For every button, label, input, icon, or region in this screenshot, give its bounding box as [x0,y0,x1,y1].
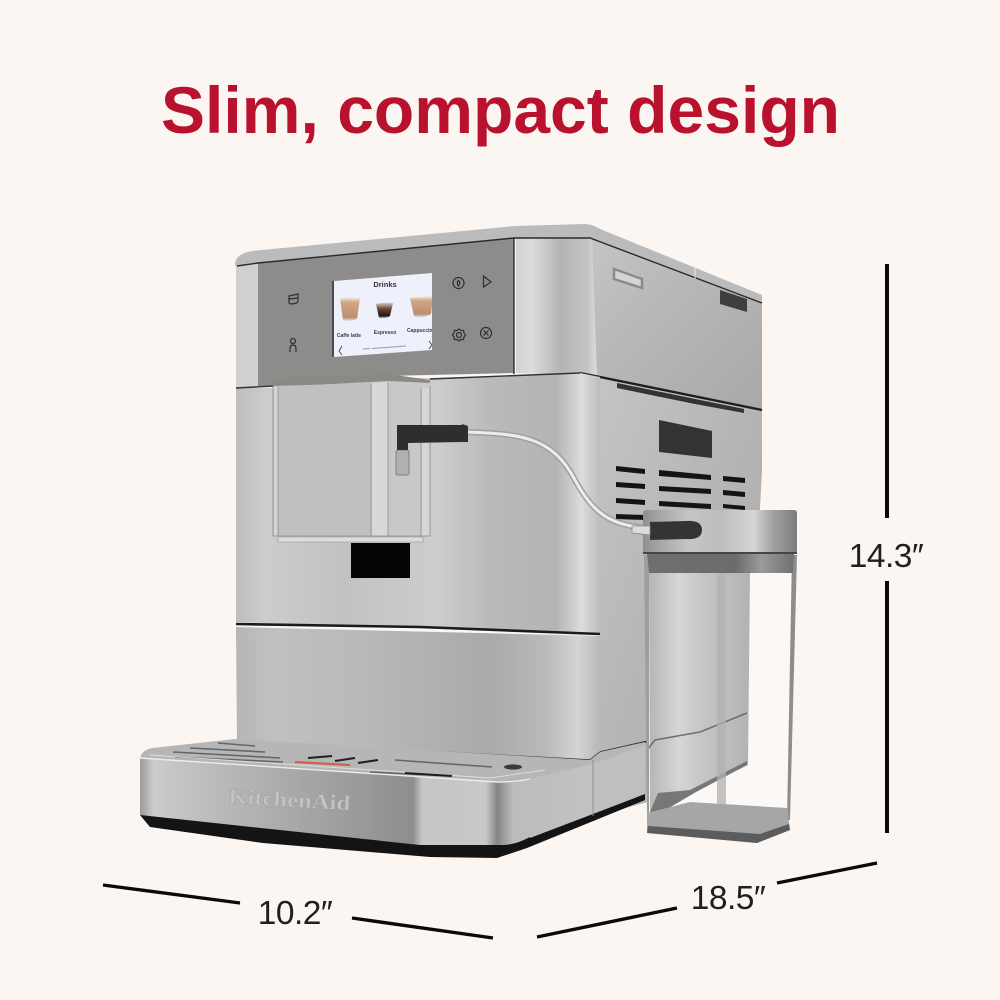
housing left highlight [274,387,278,536]
label: espresso: Espresso [374,330,396,336]
label: cappuccino: Cappuccino [407,328,436,334]
milk connector clip [396,450,409,475]
screen back arrow [339,346,342,355]
screen background [334,273,432,357]
height line lower [885,581,889,833]
panel icons [289,276,492,352]
side recess [659,420,712,458]
housing right highlight [422,388,430,536]
jug base [647,802,790,843]
tray grille slots [173,743,492,776]
tray button [504,764,522,770]
jug connector [650,521,702,540]
height dimension [849,264,924,833]
milk tube connector [397,424,468,450]
screen heading: Drinks [373,280,397,289]
top seam lines [237,238,762,374]
tray side divider [592,760,594,816]
width line left [103,885,240,903]
depth line right [777,863,877,883]
tray front face [140,758,595,845]
housing top [273,374,430,387]
tray black base [140,790,645,858]
tray inner rim [150,755,545,778]
machine side through glass [649,572,750,812]
water line in glass [647,713,747,750]
body seam [236,373,580,388]
width line right [352,918,493,938]
jug body glass [645,555,797,843]
icon: person [290,339,296,352]
icon: settings [452,329,466,341]
jug lid [643,510,797,554]
lower drawer [236,627,600,762]
housing corner [372,382,388,536]
side top slot [617,383,744,413]
machine lid [235,224,762,304]
depth line left [537,908,677,937]
bean hopper slot [720,290,747,312]
tray dark slots [308,756,452,776]
cup: cappuccino [410,296,433,317]
depth dimension [537,863,877,937]
tray side [530,745,645,838]
control panel [258,238,514,386]
milk tube [466,432,648,528]
lid split [694,268,696,279]
upper left strip [236,263,258,388]
coffee outlet window [351,543,410,578]
main body front [236,373,600,634]
title: Slim, compact design [161,73,840,147]
display screen [332,273,436,357]
cup: espresso [376,303,393,318]
housing edge lines [273,382,430,536]
embossed brand: KitchenAid [228,784,351,815]
milk tube highlight [466,432,648,528]
jug lid rim [643,552,797,554]
icon: play [484,276,491,287]
coffee machine [140,224,797,858]
icon: bean [453,278,464,289]
drawer seam [236,624,600,634]
coffee outlet housing [273,374,430,578]
cup: caffe latte [340,297,360,321]
housing lower spouts [278,537,423,542]
side seam [580,373,762,410]
label: caffe latte: Caffe latte [337,333,361,339]
tray front top highlight [140,758,530,782]
housing front face [273,383,372,536]
water tank handle [614,269,642,288]
drawer lower seam [237,741,600,760]
width dimension [103,885,493,938]
housing side [388,382,430,536]
jug left wall [644,555,649,815]
tube fitting [632,526,650,535]
depth label: 18.5″ [691,880,766,917]
jug base shadow [647,824,790,843]
upper side panel [590,238,762,410]
height line upper [885,264,889,518]
icon: cup [289,294,298,304]
lower side seam [597,713,747,753]
screen left edge [332,281,334,357]
side vents [616,466,745,520]
screen pager [363,346,406,349]
jug centre ridge [717,572,726,818]
jug right wall [787,555,797,820]
milk jug [632,510,797,843]
width label: 10.2″ [258,895,333,932]
height label: 14.3″ [849,538,924,575]
lower side panel [600,377,762,815]
tray red indicator [295,762,350,765]
upper corner panel [516,238,597,376]
jug band [647,553,794,573]
screen next arrow [429,341,432,349]
drip tray top [140,739,645,782]
lower edge in glass [650,761,747,812]
icon: cancel [481,328,492,339]
